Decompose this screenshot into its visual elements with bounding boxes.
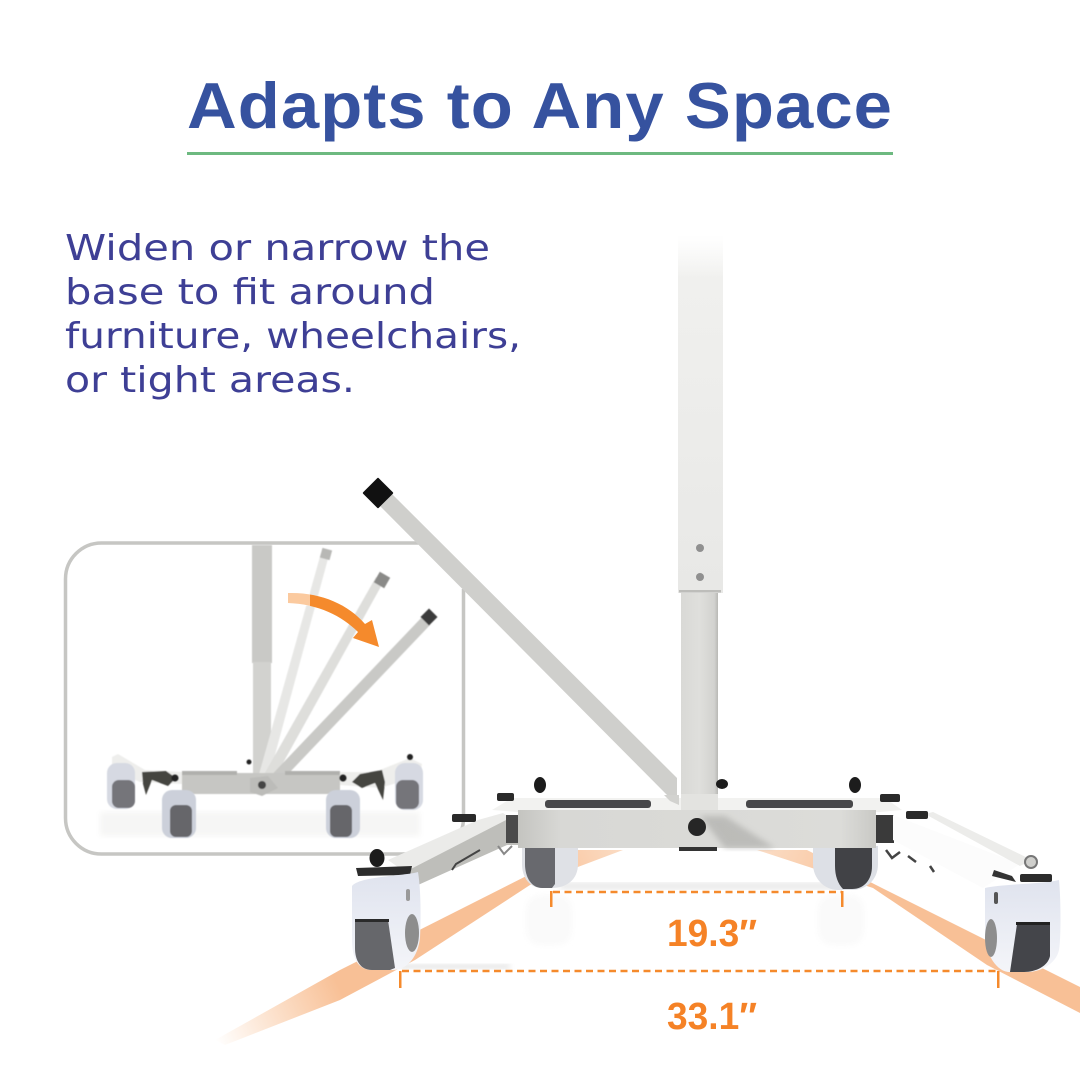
title: Adapts to Any Space bbox=[187, 69, 893, 142]
description text bbox=[65, 228, 521, 401]
main stand bbox=[362, 235, 723, 805]
floor reflections bbox=[400, 883, 864, 969]
pole holes bbox=[696, 544, 704, 581]
base front beam bbox=[518, 810, 876, 848]
rear wheels bbox=[522, 846, 878, 890]
dimension: inner width: 19.3″ bbox=[667, 913, 757, 955]
description text: Widen or narrow the bbox=[65, 228, 490, 269]
left leg bbox=[388, 813, 518, 885]
base top plate bbox=[492, 798, 902, 812]
tube ends bbox=[876, 815, 894, 843]
title underline bbox=[187, 152, 893, 155]
arm end cap bbox=[362, 477, 394, 509]
right leg bbox=[886, 811, 1032, 888]
panel: inset showing tilting arm bbox=[66, 536, 475, 854]
front right caster bbox=[985, 856, 1060, 972]
description text: base to fit around bbox=[65, 272, 435, 313]
inset floor reflection bbox=[100, 812, 420, 836]
inset illustration: stand and base bbox=[112, 545, 437, 800]
base frame bbox=[492, 777, 902, 851]
base slots bbox=[545, 800, 651, 808]
knobs on plate bbox=[534, 777, 546, 793]
inset frame bbox=[66, 543, 464, 854]
floor stripe: left bbox=[215, 850, 623, 1045]
front left caster bbox=[352, 849, 421, 970]
upper pole bbox=[678, 235, 723, 593]
description text: furniture, wheelchairs, bbox=[65, 316, 521, 357]
dimension: outer width: 33.1″ bbox=[667, 996, 757, 1038]
knob shadow bbox=[700, 816, 775, 848]
description text: or tight areas. bbox=[65, 360, 355, 401]
floor stripe: right bbox=[757, 850, 1080, 1013]
inset wheels bbox=[107, 754, 423, 838]
base knob bbox=[688, 818, 706, 836]
arrow: tilt direction bbox=[286, 590, 379, 647]
frame gap behind main arm bbox=[415, 536, 475, 589]
tilted arm bbox=[380, 494, 677, 798]
lower pole bbox=[681, 593, 718, 805]
